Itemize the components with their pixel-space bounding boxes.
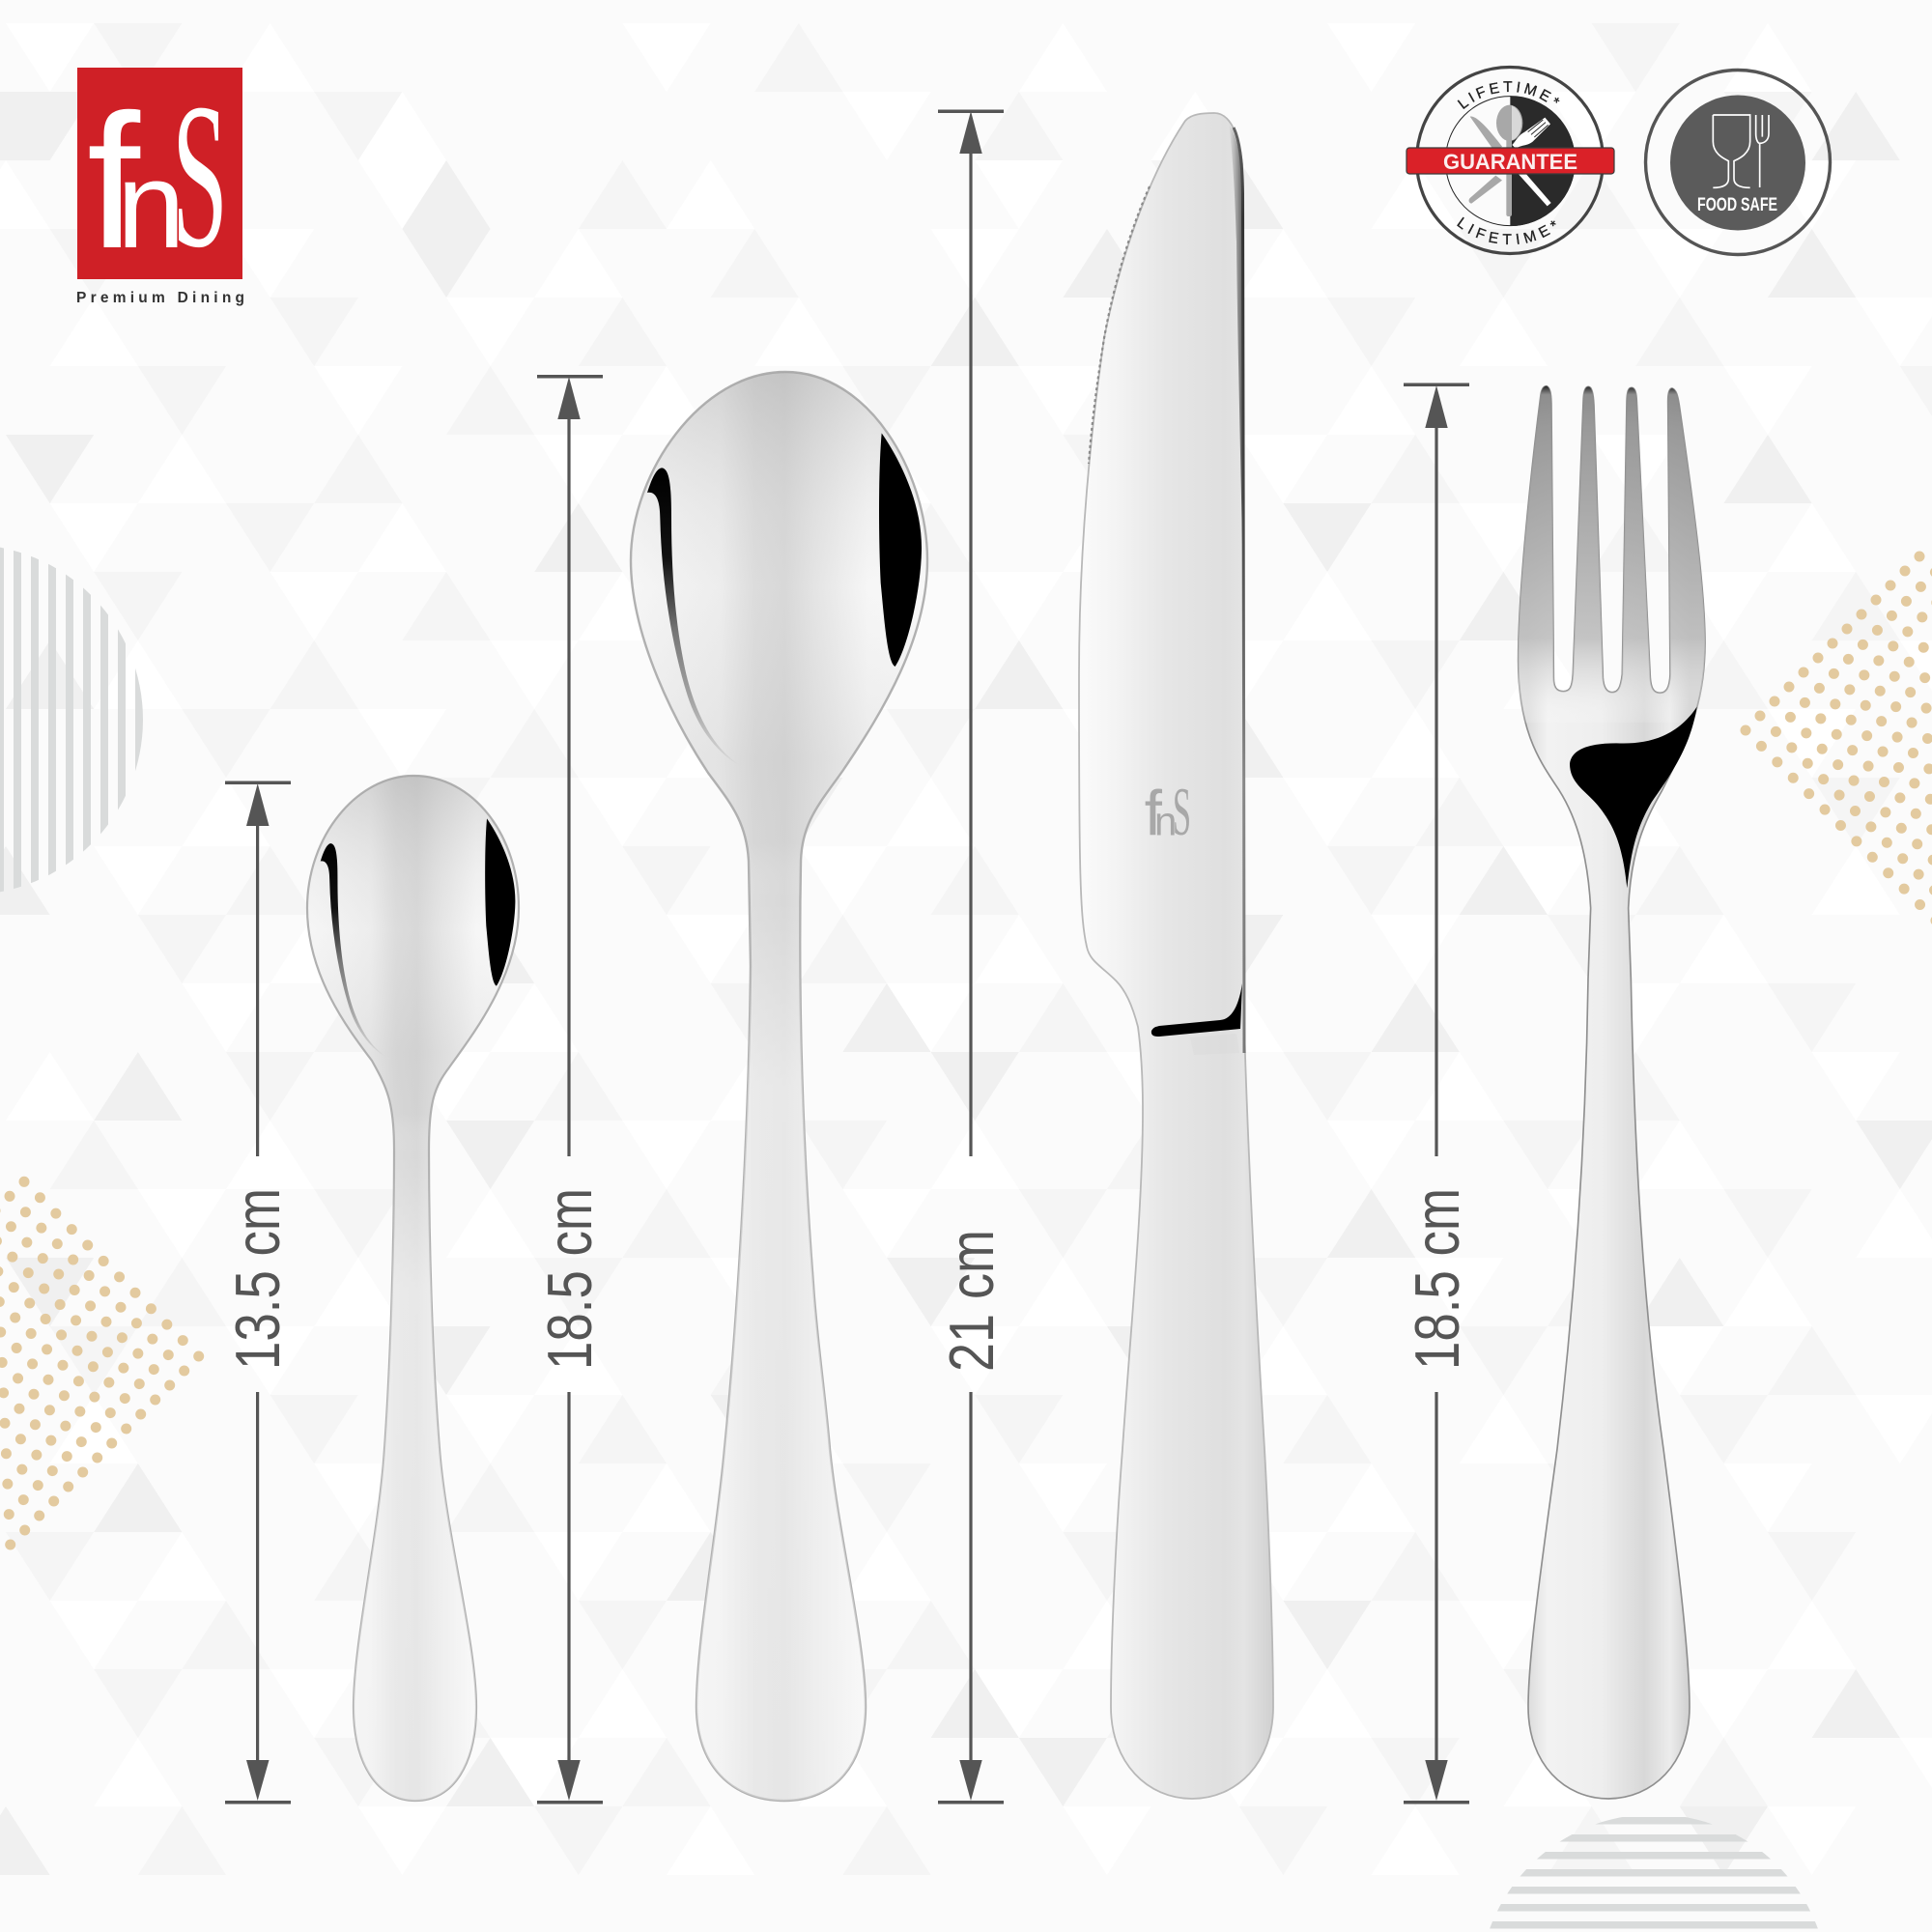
badge outer ring [1416,68,1604,253]
food safe badge [1646,70,1830,255]
logo monogram: f [87,74,141,288]
knife bolster highlight [1190,1034,1239,1055]
label 13.5 cm: 13.5 cm [222,1188,293,1370]
knife serration [1089,186,1150,464]
knife body [1079,113,1273,1799]
dimension: fork [1402,383,1472,1804]
knife bolster reflection [1151,983,1242,1037]
fork tine shading [1519,386,1705,723]
knife engraved logo: f [1145,779,1163,849]
lifetime guarantee badge [1406,66,1615,255]
spoon body [631,372,927,1801]
decorative striped half circle, left [0,547,143,893]
badge cutlery emblem [1445,96,1576,226]
spoon [631,372,927,1801]
spoon reflections [647,433,922,768]
badge arc text top: LIFETIME* [1457,81,1559,109]
teaspoon [307,776,519,1801]
food safe label: FOOD SAFE [1697,195,1777,215]
label 18.5 cm: 18.5 cm [1402,1188,1472,1370]
logo red square [77,68,242,279]
teaspoon reflections [321,818,515,1059]
dimension: knife [936,110,1007,1804]
knife engraved logo: n [1154,799,1177,844]
teaspoon shading [307,776,519,1801]
decorative dot diamond, right [1746,556,1932,923]
dimension: spoon [534,375,605,1804]
decorative dot diamond, left [0,1164,199,1545]
knife engraved logo [1145,775,1191,850]
logo monogram [87,60,228,291]
fork body [1519,386,1705,1799]
dimension: teaspoon [222,781,293,1804]
label 18.5 cm: 18.5 cm [534,1188,605,1370]
logo monogram: n [117,136,185,273]
logo tagline: Premium Dining [76,290,244,306]
brand logo [76,60,244,306]
fork black reflection [1570,707,1697,888]
knife spine shadow [1229,124,1244,618]
badge arc text bottom: LIFETIME* [1457,216,1556,245]
fork [1519,386,1705,1799]
food safe ring [1646,70,1830,255]
badge ribbon [1406,148,1614,174]
knife: S [1173,775,1191,850]
badge ribbon text: GUARANTEE [1443,150,1577,174]
brand logo: S [172,60,228,291]
spoon shading [631,372,927,1801]
teaspoon body [307,776,519,1801]
knife [1079,113,1273,1799]
food safe disc [1670,95,1805,230]
label 21 cm: 21 cm [936,1230,1007,1372]
decorative striped half circle, bottom [1490,1817,1818,1928]
knife spine [1234,128,1244,1053]
icon: wine glass and fork [1713,115,1769,187]
